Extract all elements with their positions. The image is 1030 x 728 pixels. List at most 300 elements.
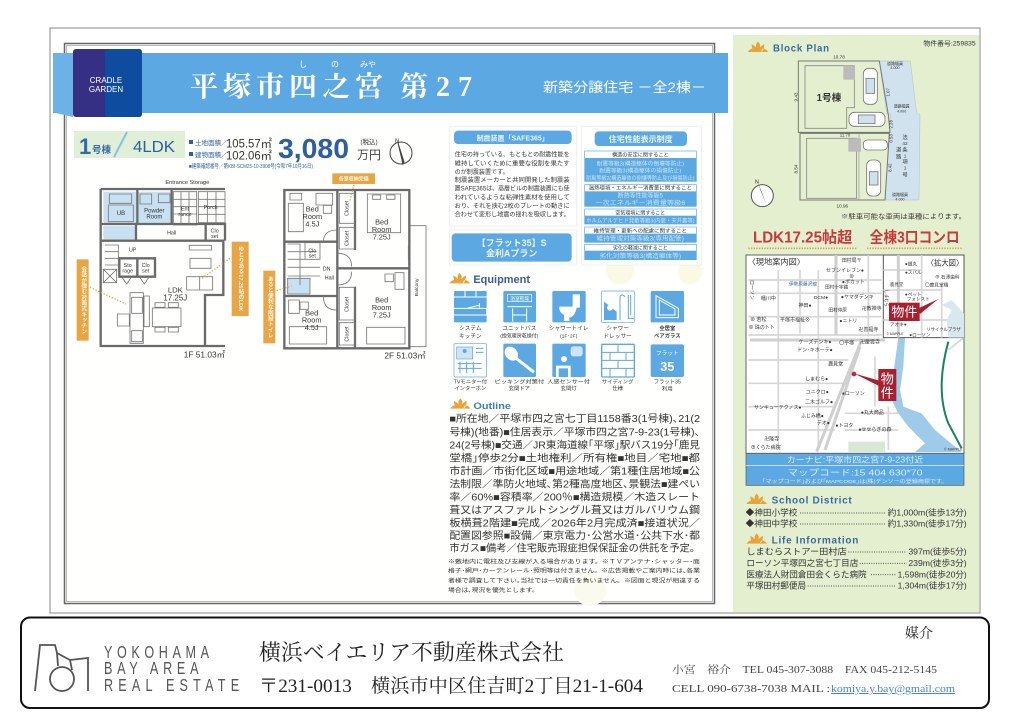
map labels: デオ● [817, 419, 830, 426]
site plan: 0.53 [889, 134, 894, 143]
school list: ◆神田小学校 [746, 508, 798, 518]
school list: ◆神田中学校 [746, 519, 798, 529]
icon: pick-resistant door: ピッキング対策付 [494, 377, 545, 385]
site plan: 11.70 [840, 133, 851, 138]
callout: storage [332, 173, 375, 201]
icon: unit bath [500, 291, 539, 339]
unit heading: 4LDK [133, 139, 175, 156]
icon: motion sensor light: 人感センサー付 [547, 377, 591, 385]
map labels: 幡川中 [761, 295, 776, 302]
map labels: 鹿見堂 [828, 360, 843, 367]
outline text: 号棟)(地番)■住居表示／平塚市四之宮7-9-23(1号棟)､ [449, 426, 700, 439]
panel: school and life info [746, 494, 967, 591]
fine print [448, 557, 700, 594]
heading: School District: School District [772, 496, 852, 507]
floor plan: 2F: Closet [345, 326, 351, 342]
icon: TV intercom [454, 344, 488, 392]
outline text: 法制限／準防火地域､第2種高度地区､景観法■建ぺい [449, 478, 700, 491]
panel: block plan [748, 39, 976, 248]
card: SAFE365: 住宅の持っている、もともとの耐震性能を [455, 151, 570, 159]
map labels: 田村局〒 [842, 257, 862, 264]
floor plan: 2F: 4.5J [305, 219, 320, 228]
card: SAFE365: われているような粘弾性素材を使用して [455, 193, 570, 201]
fine print: ※敷地内に電柱及び支線が入る場合があります。※ＴＶアンテナ･シャッター･面 [448, 557, 700, 565]
card: Flat 35S [449, 230, 577, 265]
card: housing performance [582, 127, 702, 265]
floor plan: 1F: LDK [168, 286, 184, 295]
site plan: 道路幅員 [894, 103, 910, 109]
life list: 医療法人財団倉田会くらた病院 [746, 568, 867, 579]
callout: toilet [263, 271, 292, 343]
card: housing performance: ホルムアルデヒド発散等級3(内装・天井裏等) [586, 216, 695, 224]
porch tile [173, 192, 225, 225]
icon: Flat 35: フラット35 [654, 378, 681, 385]
floor plan: 1F: Ent [181, 207, 190, 213]
broker label: 媒介 [905, 625, 933, 642]
map labels: ドン･キホーテ● [797, 347, 833, 353]
area and price: 105.57㎡ [226, 138, 272, 150]
icon: system kitchen: システム [459, 325, 482, 332]
map labels: ●トヨタ [835, 422, 853, 429]
site plan: 道路幅員 [892, 191, 908, 197]
card: housing performance: 住宅性能表示制度 [609, 134, 673, 144]
floor plan: 2F: Closet [345, 230, 351, 246]
card: housing performance: 劣化対策等級3(構造躯体等) [599, 252, 681, 260]
unit heading: 号棟 [92, 144, 112, 156]
floor plan: 1F: Powder [144, 208, 164, 214]
life list: しまむらストアー田村店 [746, 546, 847, 557]
title text: 平塚市四之宮 [190, 71, 383, 103]
title banner: 第27 [400, 71, 472, 103]
roads [748, 255, 965, 452]
map labels: 鹿見堂 [890, 281, 904, 288]
icon: Flat 35: 35 [660, 360, 674, 374]
floor plan: 2F: Room [372, 303, 391, 312]
outline text [449, 412, 700, 555]
card: housing performance: 空気環境に関すること [615, 209, 665, 216]
floor plan: 2F: 2F 51.03㎡ [384, 351, 426, 361]
map labels: 伊勢原藤沢線 [789, 281, 817, 288]
area and price [189, 133, 381, 170]
icon: system kitchen: キッチン [459, 333, 482, 340]
life list: 397m(徒歩5分) [908, 547, 967, 557]
property number: 物件番号:259835 [923, 39, 976, 48]
contact mail [672, 684, 955, 695]
map labels: ⊗ 珠のトト [749, 324, 775, 331]
site plan: 2.28 [889, 120, 894, 129]
floor plan: 2F: Room [302, 316, 321, 325]
contact mail: CELL 090‐6738‐7038 MAIL : [672, 684, 830, 695]
headline: LDK and stove: 全棟3口コンロ [870, 228, 960, 246]
site plan: 1 [904, 154, 907, 159]
furigana: みや [360, 60, 376, 69]
callout: kitchen [77, 259, 126, 341]
panel: property details [64, 44, 714, 606]
site plan: 4.000 [895, 198, 905, 202]
card: SAFE365: のが制震装置です。 [455, 168, 509, 176]
outline text: 配置図参照■設備／東京電力･公営水道･公共下水･都 [449, 529, 700, 542]
card: SAFE365: おり、それを挟む2枚のプレートの動きに [455, 202, 570, 210]
floor plan: 2F: Bed [306, 205, 319, 214]
map labels: 〈拡大図〉 [927, 257, 963, 267]
floor plan: 2F: Hall [325, 275, 334, 281]
cars [849, 68, 887, 196]
life list [746, 546, 967, 591]
map labels: しまむら [883, 290, 889, 307]
map labels: DCM● [814, 295, 828, 301]
floor plan: 1F: Entrance Storage [165, 180, 209, 186]
unit heading: 1 [79, 134, 91, 159]
heading: Outline [450, 398, 511, 411]
school list: 約1,330m(徒歩17分) [888, 519, 967, 529]
icon: pick-resistant door: 玄関ドア [509, 384, 530, 392]
map labels: ●丸大商品 [861, 409, 884, 416]
card: housing performance: 維持管理・更新への配慮に関すること [594, 227, 687, 234]
icon: shower dresser [602, 291, 634, 340]
area and price: ■建築確認番号／第KBI-SCM25-10-3908号(令和7年10月16日) [189, 162, 313, 170]
map labels: サンキューテクノス● [754, 405, 801, 411]
icon: pick-resistant door [494, 344, 545, 392]
card: housing performance: 耐風等級2(構造躯体の倒壊等防止及び損傷防止) [586, 174, 695, 182]
marker: property main: 物 [881, 371, 894, 386]
icon: motion sensor light: 玄関灯 [561, 384, 577, 392]
icon: shower dresser: ドレッサー [604, 333, 632, 340]
marker: property inset: 物件 [891, 305, 917, 320]
card: housing performance: 一次エネルギー消費量等級6 [595, 199, 686, 207]
footer: agent box [21, 618, 989, 708]
map labels: しまむら● [805, 377, 828, 383]
outline text: 板横葺2階建■完成／2026年2月完成済■接道状況／ [449, 516, 700, 529]
logo: Cradle Garden [73, 49, 142, 117]
map code band: マップコード:15 404 630*70 [787, 467, 923, 477]
contact mail: komiya.y.bay@gmail.com [831, 684, 955, 695]
floor plan: 1F: Hall [167, 230, 176, 236]
icon: compass [390, 139, 412, 164]
fine print: 場合は､現況を優先とします。 [448, 586, 539, 594]
heading: School District [746, 494, 852, 507]
floor plan: 1F: set [211, 234, 219, 240]
floor plan: 1F: Clo [211, 228, 219, 234]
map labels: ●銀丸 [905, 261, 917, 268]
site plan: 法 [902, 133, 908, 141]
floor plan: 1F: Porch [204, 205, 218, 211]
map labels: © MAPPLE [887, 332, 904, 336]
card: housing performance: 劣化の軽減に関すること [613, 244, 668, 251]
school list [746, 508, 967, 529]
school list: 約1,000m(徒歩13分) [888, 508, 967, 518]
map code band: ｢マップコード｣および｢MAPCODE｣は(株)デンソーの登録商標です。 [762, 478, 947, 485]
map labels: ●ローソン [842, 391, 865, 397]
logo: Yokohama Bay Area [35, 645, 88, 691]
icon: pair glass: ペアガラス [654, 332, 681, 340]
floor plan: 1F: set [142, 269, 150, 275]
map labels: © MAPPLE [944, 448, 963, 452]
map labels: 〈現地案内図〉 [748, 256, 805, 266]
icon: siding [602, 344, 634, 392]
map labels: ローソン [749, 280, 755, 300]
icon: unit bath: (換気暖房乾燥付) [500, 332, 539, 339]
floor plan: 2F: Room [372, 225, 391, 234]
heading: Outline: Outline [473, 401, 511, 411]
site plan: 4.000 [897, 109, 906, 113]
icon: compass: N [395, 139, 399, 145]
floor plan: 2F: Closet [345, 200, 351, 216]
map labels: 〇鹿見堂橋 [925, 282, 949, 289]
map labels: ●ペット [905, 292, 922, 297]
callout: kitchen: 会話が弾む対面式キッチン [80, 265, 86, 334]
map labels: ●ニトリ [839, 318, 857, 324]
icon: TV intercom: インターホン [454, 384, 486, 392]
map labels: 卍善福寺 [858, 326, 878, 333]
title banner [53, 49, 728, 117]
icon: Flat 35: 利用 [662, 384, 673, 392]
floor plan: 2F: Room [303, 212, 322, 221]
map labels: ●ヤマダデンキ [841, 293, 874, 300]
life list: ローソン平塚四之宮七丁目店 [746, 557, 859, 568]
panel: equipment [449, 273, 684, 392]
panel: outline [448, 398, 700, 594]
card: housing performance: 維持管理対策等級3(専用配管) [597, 235, 684, 243]
site plan: 路 [896, 152, 902, 160]
icon: Flat 35 [651, 344, 684, 392]
heading: Life Information: Life Information [772, 535, 858, 546]
callout: LDK: ゆとりある17.25帖のLDK [237, 246, 244, 312]
floor plan: 1F: UP [129, 248, 137, 254]
icon: siding: サイディング [602, 377, 634, 385]
marker: property inset [889, 299, 938, 321]
area and price: (税込) [360, 137, 378, 146]
map labels: 〇平塚 [839, 340, 854, 347]
floor plan: 1F: Room [146, 214, 162, 220]
map labels: 二木ゴルフ● [805, 398, 833, 405]
map labels [748, 256, 963, 452]
floor plan: 1F: 17.25J [163, 294, 187, 303]
floor plan: 2F: 4.5J [305, 323, 319, 332]
life list: 1,598m(徒歩20分) [898, 569, 967, 579]
map labels: ⊗ 若松 [750, 316, 767, 323]
card: SAFE365: 維持していくために重要な役割を果たす [455, 159, 570, 167]
site plan: 4.000 [890, 66, 900, 70]
marker: property main [852, 369, 896, 401]
icon: unit bath: 浴室乾燥 [510, 295, 529, 302]
area and price: 万円 [357, 148, 381, 162]
map labels: リサイクルプラザ [926, 327, 961, 333]
floor plan: 1F: 1F 51.03㎡ [184, 349, 226, 359]
card: housing performance: 断熱等性能等級5 [618, 192, 664, 200]
panel: green sidebar [733, 35, 979, 612]
logo wordmark: BAY AREA [104, 659, 199, 679]
icon: pair glass [651, 291, 684, 340]
site plan: 条 [902, 146, 908, 154]
walls [101, 189, 225, 346]
callout: LDK [202, 242, 249, 316]
contact phone: 小宮 裕介 TEL 045-307-3088 FAX 045-212-5145 [672, 663, 937, 676]
outline text: 堂橋｣停歩2分■土地権利／所有権■地目／宅地■都 [449, 452, 700, 465]
site plan: 道 [896, 146, 902, 154]
icon: system kitchen [454, 291, 487, 340]
floor plan: 2F [263, 173, 426, 361]
map code band [746, 453, 964, 485]
paper sheet [50, 28, 980, 613]
site plan: 9.43 [794, 92, 799, 102]
floor plan: 2F: 7.25J [373, 232, 391, 241]
site plan: 42 [902, 141, 908, 146]
heading: Life Information [746, 533, 858, 546]
map labels: ふじみ橋● [801, 412, 824, 419]
site plan: 1号棟 [817, 92, 842, 104]
site plan: 1 [904, 166, 907, 171]
card: housing performance: 構造の安定に関すること [612, 151, 669, 159]
company address: 〒231-0013 横浜市中区住吉町2丁目21-1-604 [259, 675, 644, 697]
map labels: 卍慶雲寺 [860, 338, 880, 345]
logo: Cradle Garden: GARDEN [89, 85, 123, 94]
map labels: ⊗ [849, 274, 854, 280]
map code band: カーナビ:平塚市四之宮7-9-23付近 [787, 454, 923, 464]
floor plan: 2F: 7.25J [373, 310, 391, 319]
room fills [103, 192, 171, 239]
life list: 239m(徒歩3分) [908, 558, 967, 568]
rail line [942, 342, 962, 448]
fine print: 者様で調査して下さい｡当社では一切責任を負いません。※図面と現況が相違する [448, 576, 700, 584]
site plan: 10.96 [837, 204, 849, 209]
furigana: の [331, 60, 339, 69]
floor plan: 2F: Bed [375, 218, 388, 227]
company name: 横浜ベイエリア不動産株式会社 [259, 640, 564, 665]
panel: location map [746, 255, 965, 485]
floor plan: 1F: rage [122, 269, 133, 275]
icon: shower toilet: シャワートイレ [549, 325, 589, 332]
logo wordmark: REAL ESTATE [104, 676, 239, 696]
map labels: ユニクロ● [806, 390, 829, 396]
outline text: 市ガス■備考／住宅販売瑕疵担保保証金の供託を予定。 [449, 542, 700, 555]
headline: LDK and stove [748, 228, 963, 248]
site plan: 8.54 [794, 164, 799, 174]
outline text: 市計画／市街化区域■用途地域／第1種住居地域■公 [449, 465, 700, 478]
parking note: ※駐車可能な車両は車種によります。 [841, 211, 966, 220]
card: SAFE365 [449, 127, 577, 226]
icon: TV intercom: TVモニター付 [454, 377, 488, 385]
logo: Cradle Garden: CRADLE [90, 76, 122, 85]
floor plan: 2F: Closet [345, 296, 351, 312]
map labels: フォレスト [907, 297, 930, 302]
map labels: 神田● [799, 302, 811, 309]
card: housing performance: 温熱環境・エネルギー消費量に関すること [589, 185, 692, 192]
map labels: ●スバル [905, 270, 922, 275]
floor plan: 1F: Sto [124, 263, 132, 269]
site plan: 8.42 [888, 163, 893, 172]
map labels: 平塚市福祉⊗ [780, 317, 810, 324]
map labels: ●ローソン [909, 333, 931, 338]
map labels: 卍教禅寺 [862, 305, 882, 312]
icon: motion sensor light [547, 344, 591, 392]
life list: 1,304m(徒歩17分) [898, 581, 967, 591]
card: Flat 35S: 【フラット35】S [477, 238, 547, 248]
outline text: 24(2号棟)■交通／JR東海道線｢平塚｣駅バス19分｢鹿見 [449, 439, 700, 452]
card: Flat 35S: 金利Aプラン [486, 248, 537, 259]
floor plan: 1F [77, 180, 249, 359]
marker: property main: 件 [881, 385, 894, 400]
site plan: 号 [902, 171, 908, 178]
map labels: ⊕くらた病院 [751, 444, 781, 451]
area and price: 建物面積／ [195, 150, 228, 159]
card: SAFE365: 置SAFE365は、高層ビルの制震装置にも使 [455, 185, 570, 193]
card: SAFE365: 制震装置「SAFE365」 [477, 133, 549, 142]
card: SAFE365: 制震装置メーカーと共同開発した制震装 [455, 176, 570, 184]
icon: north arrow [751, 179, 773, 207]
icon: north arrow: N [755, 179, 759, 185]
map labels: 卍隆寺 [764, 436, 779, 443]
floor plan: 2F: Balcony [414, 278, 420, 296]
site plan: 項 [902, 159, 908, 166]
floor plan: 1F: Clo [142, 263, 150, 269]
fine print: 格子･網戸･カーテンレール･照明等は付きません。※広告掲載やご案内時には､各業 [448, 567, 700, 575]
icon: pair glass: 全居室 [659, 324, 676, 332]
site plan [794, 54, 920, 209]
river [892, 338, 962, 452]
card: housing performance: 耐震等級3(構造躯体の損傷防止) [599, 166, 681, 174]
map labels: ●せせらぎの森 [859, 426, 891, 433]
floor plan: 1F: UB [117, 211, 125, 217]
map labels: 田村十字路 [825, 284, 849, 291]
floor plan: 2F: DN [323, 267, 331, 273]
icon: shower toilet: (1F･2F) [560, 333, 578, 339]
map labels: ケーズデンキ● [799, 338, 831, 345]
life list: 平塚田村郵便局 [746, 580, 806, 591]
card: SAFE365: 合わせて変形し地震の揺れを吸収します。 [455, 211, 570, 219]
icon: Flat 35: フラット [656, 350, 679, 357]
heading: Block Plan [748, 42, 829, 55]
area and price: 102.06㎡ [226, 150, 272, 162]
area and price: 3,080 [278, 133, 349, 164]
callout: toilet: あると便利な階段トイレ [266, 276, 273, 338]
heading: Equipment: Equipment [473, 274, 530, 286]
map labels: ⊕ 石澤歯科 [935, 273, 960, 280]
card: housing performance: 耐震等級3(構造躯体の倒壊等防止) [597, 160, 684, 168]
callout: storage: 各室収納完備 [339, 176, 369, 183]
headline: LDK and stove: LDK17.25帖超 [753, 228, 853, 246]
site plan: 道路幅員 [887, 60, 903, 66]
icon: siding: 仕様 [612, 384, 624, 392]
furigana [299, 60, 376, 69]
site plan: 10.78 [833, 54, 845, 59]
icon: shower dresser: シャワー [606, 325, 629, 332]
furigana: し [299, 60, 307, 69]
subtitle: 新築分譲住宅 －全2棟－ [543, 80, 706, 95]
outline text: 葺又はアスファルトシングル葺又はガルバリウム鋼 [449, 504, 700, 517]
outline text: 率／60%■容積率／200％■構造規模／木造スレート [449, 491, 700, 504]
heading: Block Plan: Block Plan [773, 44, 829, 55]
unit heading [74, 131, 185, 159]
floor plan: 2F: set [309, 254, 316, 260]
icon: shower toilet [549, 291, 589, 339]
map labels: 田村仲原 [828, 306, 847, 313]
logo wordmark [104, 643, 239, 696]
floor plan: 2F: Bed [375, 296, 388, 305]
area and price: 土地面積／ [195, 138, 228, 147]
map labels: ●ポカット [842, 278, 865, 285]
panel: seismic and performance cards [449, 127, 702, 265]
icon: unit bath: ユニットバス [502, 325, 537, 332]
logo wordmark: YOKOHAMA [104, 643, 210, 663]
heading: Equipment [449, 273, 530, 286]
site plan: 1.07 [885, 88, 890, 97]
floor plan: 2F: Clo [308, 248, 316, 254]
map labels: セブンイレブン● [826, 267, 864, 274]
floor plan: 2F: Bed [305, 308, 318, 317]
map labels: アオキ● [890, 322, 907, 328]
outline text: ■所在地／平塚市四之宮七丁目1158番3(1号棟)､21(2 [449, 412, 700, 425]
floor plan: 1F: rance [178, 212, 192, 218]
